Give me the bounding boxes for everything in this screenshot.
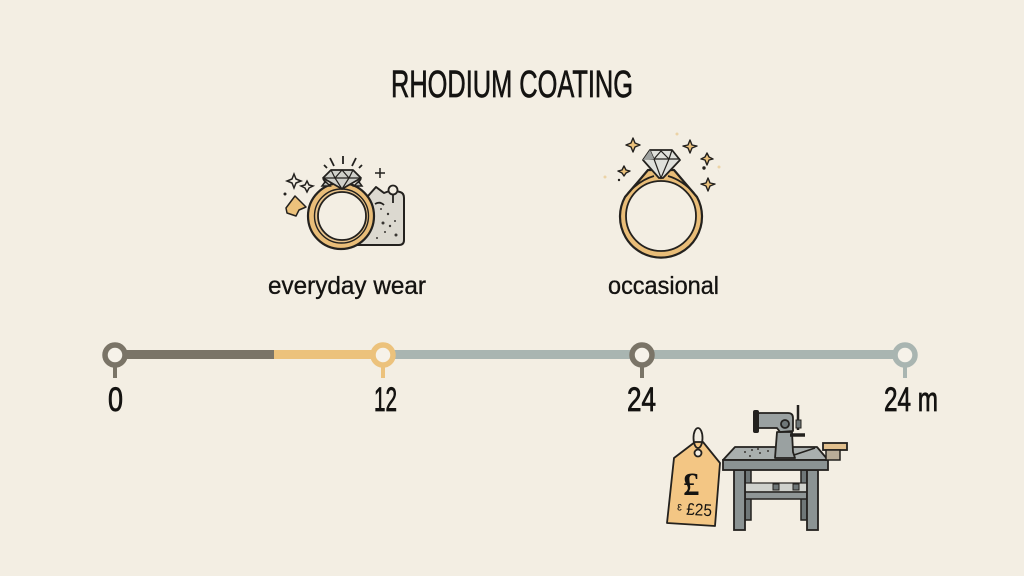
icon: worn everyday ring (284, 156, 404, 249)
segment: dark (115, 350, 274, 359)
tick label: 24 m: 24 m (884, 381, 938, 419)
icon: price tag (667, 428, 720, 526)
icon: workbench with machine (723, 405, 847, 530)
sparkles (287, 168, 385, 192)
tick label: 12: 12 (374, 381, 397, 419)
shelf (745, 483, 807, 492)
node: 24 m (895, 345, 915, 378)
rays (324, 156, 362, 168)
chip (286, 196, 306, 216)
timeline (105, 345, 915, 378)
sparkles (618, 138, 715, 191)
front legs (734, 470, 745, 530)
icon: price tag: £ (683, 467, 700, 503)
back legs (745, 470, 751, 520)
icon: occasional ring (604, 132, 720, 258)
segment: grey (383, 350, 905, 359)
diamond (323, 170, 361, 189)
label: occasional: occasional (608, 272, 719, 300)
icon: price tag: ᵋ £25 (677, 499, 712, 520)
band with shoulders (620, 170, 702, 258)
segment: gold (274, 350, 383, 359)
wooden block (823, 443, 847, 450)
tick label: 0: 0 (108, 381, 123, 419)
machine (775, 432, 795, 458)
rock slab (355, 187, 404, 245)
node: 12 (373, 345, 393, 378)
diamond (643, 150, 680, 178)
table top (723, 447, 828, 460)
band (308, 183, 374, 249)
label: everyday wear: everyday wear (268, 272, 426, 300)
node: 0 (105, 345, 125, 378)
node: 24 (632, 345, 652, 378)
tick label: 24: 24 (627, 381, 656, 419)
title: RHODIUM COATING (391, 64, 633, 106)
